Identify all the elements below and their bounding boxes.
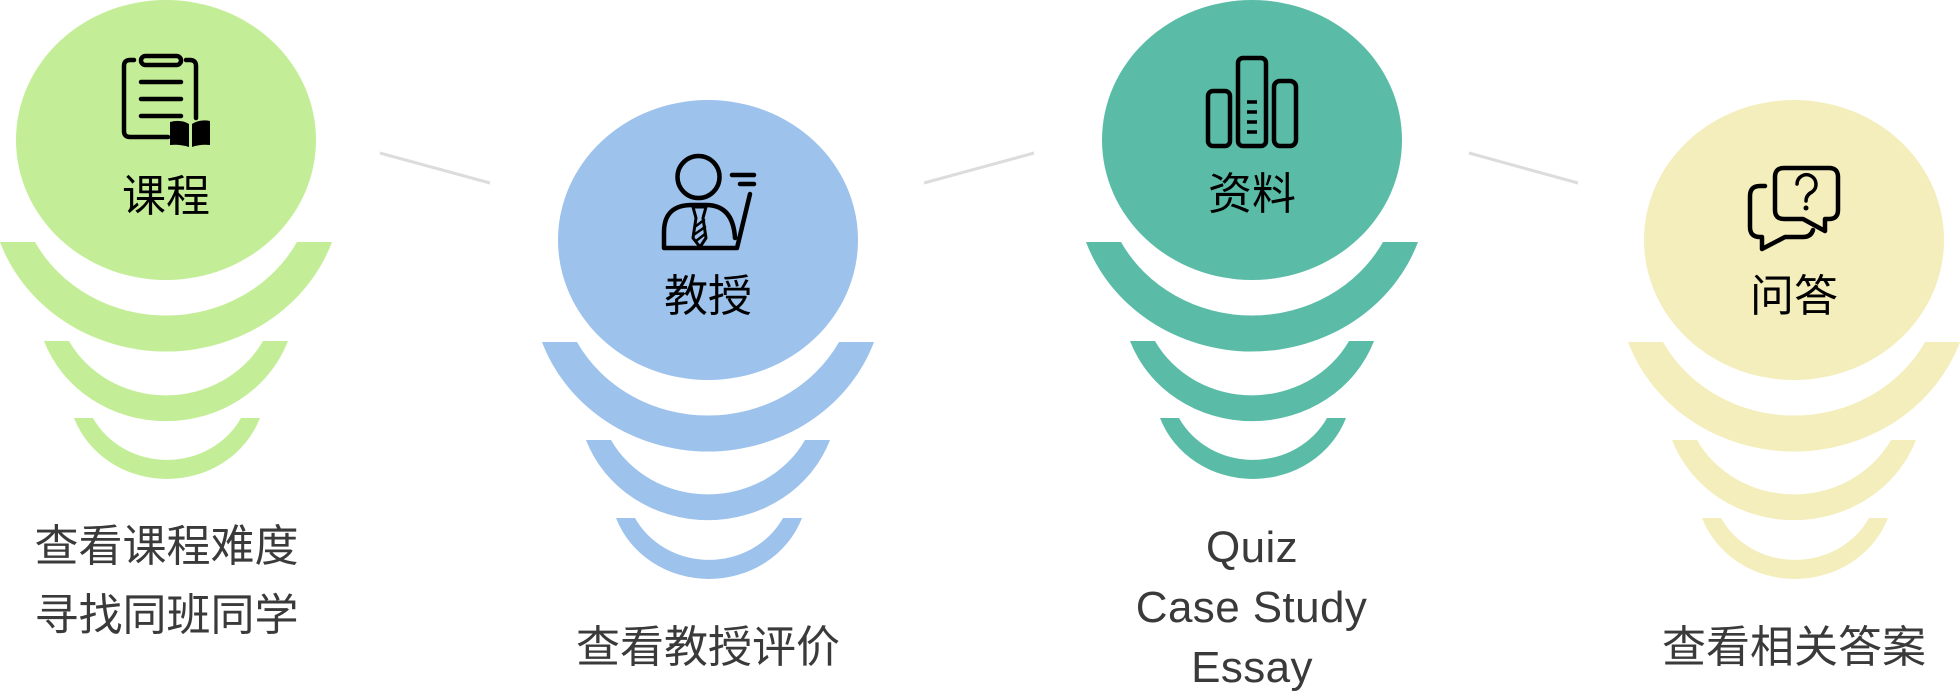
label: 教授: 教授 [664,272,752,321]
description text: Essay [1191,643,1313,692]
icon: clipboard with book [124,56,210,147]
description text: Quiz [1206,523,1298,572]
circle: 问答 [1644,100,1944,380]
panel: 课程 [0,0,332,640]
icon: question chat bubbles [1750,168,1838,249]
ripple arcs [0,242,332,479]
description text: Case Study [1136,583,1367,632]
label: 问答: 问答 [1750,272,1838,321]
panel: 资料 [1086,0,1418,692]
circle: 课程 [16,0,316,280]
ripple arcs [542,342,874,579]
ripple arcs [1628,342,1960,579]
icon: professor [664,156,754,248]
description text: 查看相关答案 [1662,623,1926,672]
label: 课程: 课程 [122,172,210,221]
description text: 查看教授评价 [576,623,840,672]
connector line 1 [380,153,490,183]
connector line 2 [924,153,1034,183]
ripple arcs [1086,242,1418,479]
connector line 3 [1469,153,1578,183]
description text [1136,523,1367,692]
label: 资料: 资料 [1208,170,1296,219]
circle: 资料 [1102,0,1402,280]
circle: 教授 [558,100,858,380]
panel: 教授 [542,100,874,672]
description text [34,522,298,640]
description text: 查看课程难度 [34,522,298,571]
icon: bar chart [1208,58,1296,146]
panel: 问答 [1628,100,1960,672]
description text: 寻找同班同学 [34,591,298,640]
